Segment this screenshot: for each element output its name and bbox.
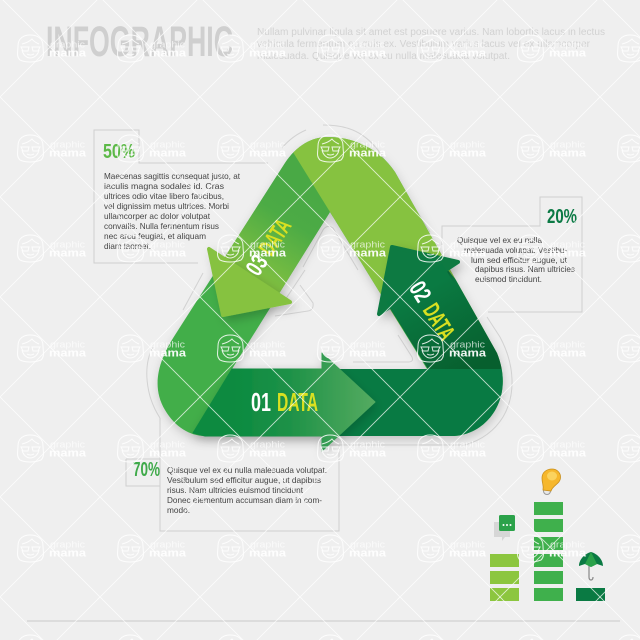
20% text block: dapibus risus. Nam ultricies [475, 264, 575, 274]
band base shadow [158, 137, 503, 436]
70% text block: Donec elementum accumsan diam in com- [167, 495, 322, 505]
right bar [576, 588, 605, 601]
50% callout frame [94, 130, 268, 263]
arrow 01: DATA [277, 387, 318, 417]
label 01 DATA: 01 [251, 387, 271, 417]
header paragraph: Nullam pulvinar ligula sit amet est posuere varius. Nam lobortis lacus in lectus [257, 27, 605, 38]
70% text block [167, 465, 327, 515]
icon: light bulb [542, 469, 561, 494]
70% text block: modo. [167, 505, 190, 515]
icon: chat bubble [494, 515, 515, 541]
label 02 DATA: 02 [403, 277, 436, 307]
arrow 01 [193, 353, 375, 451]
50% value: 50% [103, 141, 135, 163]
title: INFOGRAPHIC [46, 18, 233, 66]
header paragraph: vehicula fermentum eu quis ex. Vestibulum varius lacus vel ex ullamcorper [257, 39, 591, 50]
label 03 DATA [241, 214, 297, 281]
50% text block: Maecenas sagittis consequat justo, at [104, 171, 241, 181]
70% text block: risus. Nam ultricies euismod tincidunt [167, 485, 304, 495]
50% text block: ultrices odio vitae libero faucibus, [104, 191, 224, 201]
bottom right dark segment [339, 369, 503, 436]
bottom rule [27, 620, 620, 622]
arrow 03 [209, 214, 297, 315]
panel: 50% callout [94, 130, 268, 263]
arrow 02 shaft [390, 270, 502, 369]
20% text block: lum sed efficitur augue, ut [471, 255, 568, 265]
middle bars [534, 502, 563, 601]
50% text block: vel dignissim metus ultrices. Morbi [104, 201, 229, 211]
20% text block: malesuada volutpat. Vestibu- [464, 245, 567, 255]
50% text block: nec arcu feugiat, et aliquam [104, 231, 206, 241]
label 03 DATA: DATA [254, 214, 297, 261]
20% value: 20% [547, 206, 577, 228]
20% text block [457, 235, 575, 284]
panel: 20% callout [442, 197, 582, 312]
left bars [490, 554, 519, 601]
50% text block: diam laoreet. [104, 241, 151, 251]
label 02 DATA: DATA [417, 299, 460, 345]
icon: umbrella [579, 552, 603, 580]
70% text block: Quisque vel ex eu nulla malesuada volutpat. [167, 465, 327, 475]
header paragraph [257, 27, 605, 62]
panel: 70% callout [126, 418, 339, 531]
70% callout frame [126, 418, 339, 531]
band segments [225, 137, 503, 436]
header paragraph: malesuada. Quisque vel ex eu nulla malesuada volutpat. [257, 51, 510, 62]
label 02 DATA [403, 277, 460, 345]
20% text block: euismod tincidunt. [475, 274, 542, 284]
70% text block: Vestibulum sed efficitur augue, ut dapibus [167, 475, 321, 485]
label 03 DATA: 03 [241, 250, 274, 281]
20% text block: Quisque vel ex eu nulla [457, 235, 542, 245]
50% text block [104, 171, 241, 251]
left segment upper [225, 152, 332, 293]
70% value: 70% [133, 459, 160, 481]
recycling triangle diagram [158, 120, 530, 451]
50% text block: iaculis magna sodales id. Cras [104, 181, 224, 191]
triangle thin outline [147, 125, 512, 445]
arrow 02 [377, 245, 465, 368]
bar chart [490, 502, 605, 601]
right light segment [293, 137, 484, 330]
50% text block: ullamcorper ac dolor volutpat [104, 211, 211, 221]
50% text block: convallis. Nulla fermentum risus [104, 221, 219, 231]
20% callout frame [442, 197, 582, 312]
